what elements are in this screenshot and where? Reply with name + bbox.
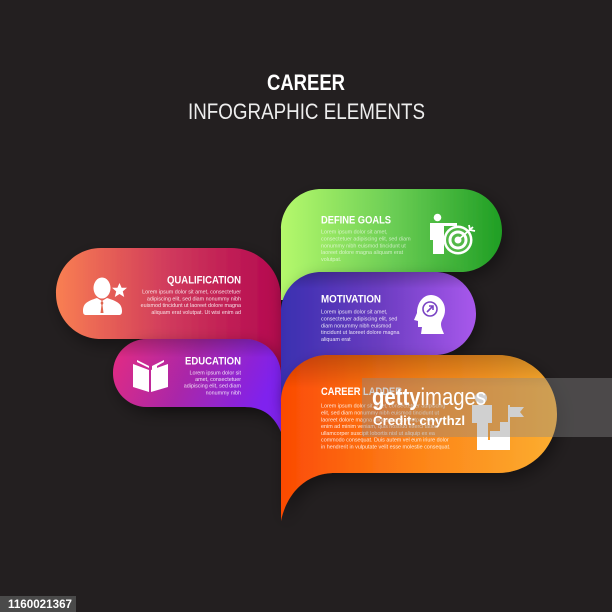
panel: define goals (281, 189, 502, 300)
text: motivation: diam nonummy nibh euismod (321, 323, 391, 329)
text: motivation (321, 310, 400, 343)
text: qualification: euismod tincidunt ut laoreet dolore magna (141, 303, 241, 309)
icon: open book (133, 360, 168, 392)
title (188, 70, 425, 124)
text: define goals: Lorem ipsum dolor sit amet, (321, 230, 388, 236)
text: career ladder (321, 404, 450, 450)
text: education (184, 370, 242, 396)
text: motivation: Lorem ipsum dolor sit amet, (321, 310, 388, 316)
heading: qualification: QUALIFICATION (167, 274, 241, 286)
text: qualification: adipiscing elit, sed diam nonummy nibh (147, 296, 241, 302)
text: education: adipiscing elit, sed diam (184, 384, 242, 390)
text: motivation: tincidunt ut laoreet dolore magna (321, 330, 400, 336)
text: career ladder: Lorem ipsum dolor sit amet, consectetuer adipiscing (321, 404, 445, 410)
watermark: getty images: gettyimages (372, 384, 486, 411)
icon: head with arrow (414, 295, 445, 334)
heading: career ladder: CAREER LADDER (321, 386, 402, 398)
text: career ladder: laoreet dolore magna aliquam erat volutpat. Ut wisi (321, 417, 442, 423)
text: qualification (141, 290, 241, 316)
heading: motivation: MOTIVATION (321, 294, 381, 306)
image id tag (0, 596, 76, 612)
text: define goals: consectetuer adipiscing elit, sed diam (321, 236, 411, 242)
watermark band (362, 378, 612, 437)
text: define goals: laoreet dolore magna aliquam erat (321, 250, 404, 256)
icon: person with star (83, 278, 127, 315)
subtitle: INFOGRAPHIC ELEMENTS (188, 99, 425, 124)
text: career ladder: ullamcorper suscipit lobortis nisl ut aliquip ex ea (321, 431, 435, 437)
panel: motivation (281, 272, 476, 400)
title: CAREER (267, 70, 345, 95)
heading: define goals: DEFINE GOALS (321, 214, 391, 226)
icon: person with target (430, 214, 475, 254)
text: career ladder: enim ad minim veniam, quis nostrud exerci tation (321, 424, 438, 430)
text: career ladder: in hendrerit in vulputate velit esse molestie consequat. (321, 444, 450, 450)
text: qualification: Lorem ipsum dolor sit amet, consectetuer (142, 290, 241, 296)
text: education: Lorem ipsum dolor sit (189, 370, 242, 376)
text: motivation: aliquam erat (321, 337, 351, 343)
text: career ladder: commodo consequat. Duis autem vel eum iriure dolor (321, 438, 449, 444)
panel: education (113, 339, 281, 432)
text: define goals: nonummy nibh euismod tincidunt ut (321, 243, 406, 249)
image id tag: 1160021367 (8, 599, 72, 611)
text: define goals (321, 230, 411, 263)
text: career ladder: elit, sed diam nonummy nibh euismod tincidunt ut (321, 410, 440, 416)
heading: education: EDUCATION (185, 356, 241, 368)
text: education: amet, consectetuer (195, 377, 241, 383)
panel: career ladder (281, 355, 557, 521)
text: define goals: volutpat. (321, 257, 341, 263)
text: qualification: aliquam erat volutpat. Ut wisi enim ad (151, 310, 241, 316)
text: motivation: consectetuer adipiscing elit, sed (321, 316, 397, 322)
watermark: credit: Credit: cnythzl (373, 414, 465, 428)
panel: qualification (56, 248, 281, 400)
icon: person on stairs with flag (472, 392, 524, 450)
text: education: nonummy nibh (206, 390, 241, 396)
